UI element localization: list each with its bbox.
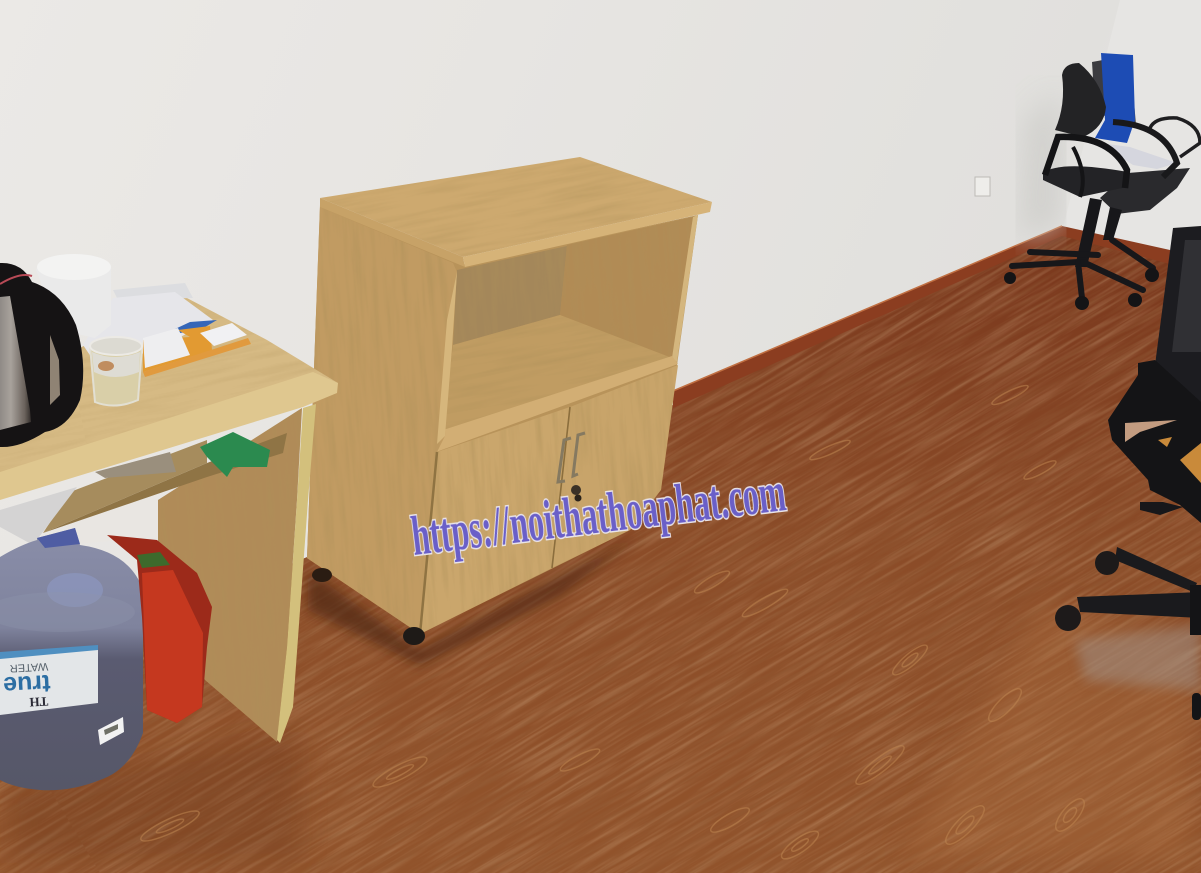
cabinet right interior: [560, 217, 693, 358]
casters: [1055, 551, 1119, 631]
watermark url: https://noithathoaphat.com: [408, 461, 789, 568]
back office chair with blue cloth: [1004, 53, 1200, 310]
kettle black housing: [0, 263, 83, 447]
right front edge: [672, 215, 698, 362]
wall gap behind tray: [60, 480, 158, 545]
floor: [0, 232, 1201, 873]
bottle barcode sticker: [98, 717, 124, 745]
skirting board: [673, 226, 1170, 408]
kettle steel body: [0, 296, 31, 430]
papers on desk: [83, 283, 251, 377]
bottle label: WATER: [9, 660, 48, 674]
arm and seat frame: [1108, 360, 1201, 523]
glass on desk: [90, 337, 142, 406]
left door: [420, 407, 570, 634]
door lock: [571, 485, 581, 495]
desk top: [0, 297, 338, 474]
gap under arm: [1125, 420, 1177, 442]
bottle cap highlight: [47, 573, 103, 607]
red bag: [107, 535, 212, 723]
cabinet silhouette base: [307, 205, 698, 634]
arm rests: [1150, 118, 1200, 157]
chair shadow on wall: [1020, 90, 1062, 240]
mesh back: [1155, 226, 1201, 405]
right door: [552, 365, 678, 568]
seat back: [1055, 63, 1106, 137]
cabinet back interior: [453, 246, 567, 345]
cabinet: [307, 157, 712, 645]
chair reflection on floor: [1075, 625, 1201, 690]
floor wood knots: [138, 383, 1089, 863]
desk leg: [158, 408, 302, 742]
green plastic bag: [200, 432, 270, 477]
electric kettle: [0, 263, 83, 447]
papers under desk: [0, 487, 77, 545]
papers on seat: [1100, 143, 1177, 169]
foreground office chair at right edge: [1055, 226, 1201, 720]
far seat: [1100, 168, 1190, 214]
white tissue roll: [36, 254, 111, 338]
bottle label: true: [2, 669, 51, 699]
stem and base: [1075, 198, 1102, 267]
cabinet left side: [307, 207, 457, 634]
floor darker lower-left tone: [10, 730, 300, 863]
wall corner shade: [1062, 0, 1201, 262]
wall socket: [975, 177, 990, 196]
floor lighter tone near right: [900, 600, 1190, 860]
kettle gap: [50, 335, 60, 405]
keyboard tray: [43, 433, 287, 533]
wood desk: [0, 297, 338, 743]
cabinet top: [320, 157, 712, 257]
side front lit edge: [437, 272, 457, 444]
bottle label: TH: [29, 694, 49, 710]
cabinet shelf: [443, 315, 672, 430]
cabinet wheels: [403, 627, 425, 645]
lever: [1140, 502, 1183, 515]
bottle label: [0, 645, 98, 715]
shadow under cabinet: [308, 535, 640, 665]
blue cloth: [1095, 53, 1135, 143]
water bottle: [0, 528, 143, 790]
door handles: [558, 433, 585, 482]
seat cushion beads: [1180, 443, 1201, 483]
base legs: [1115, 547, 1197, 592]
kettle red lid line: [0, 275, 32, 284]
near seat: [1043, 166, 1128, 197]
